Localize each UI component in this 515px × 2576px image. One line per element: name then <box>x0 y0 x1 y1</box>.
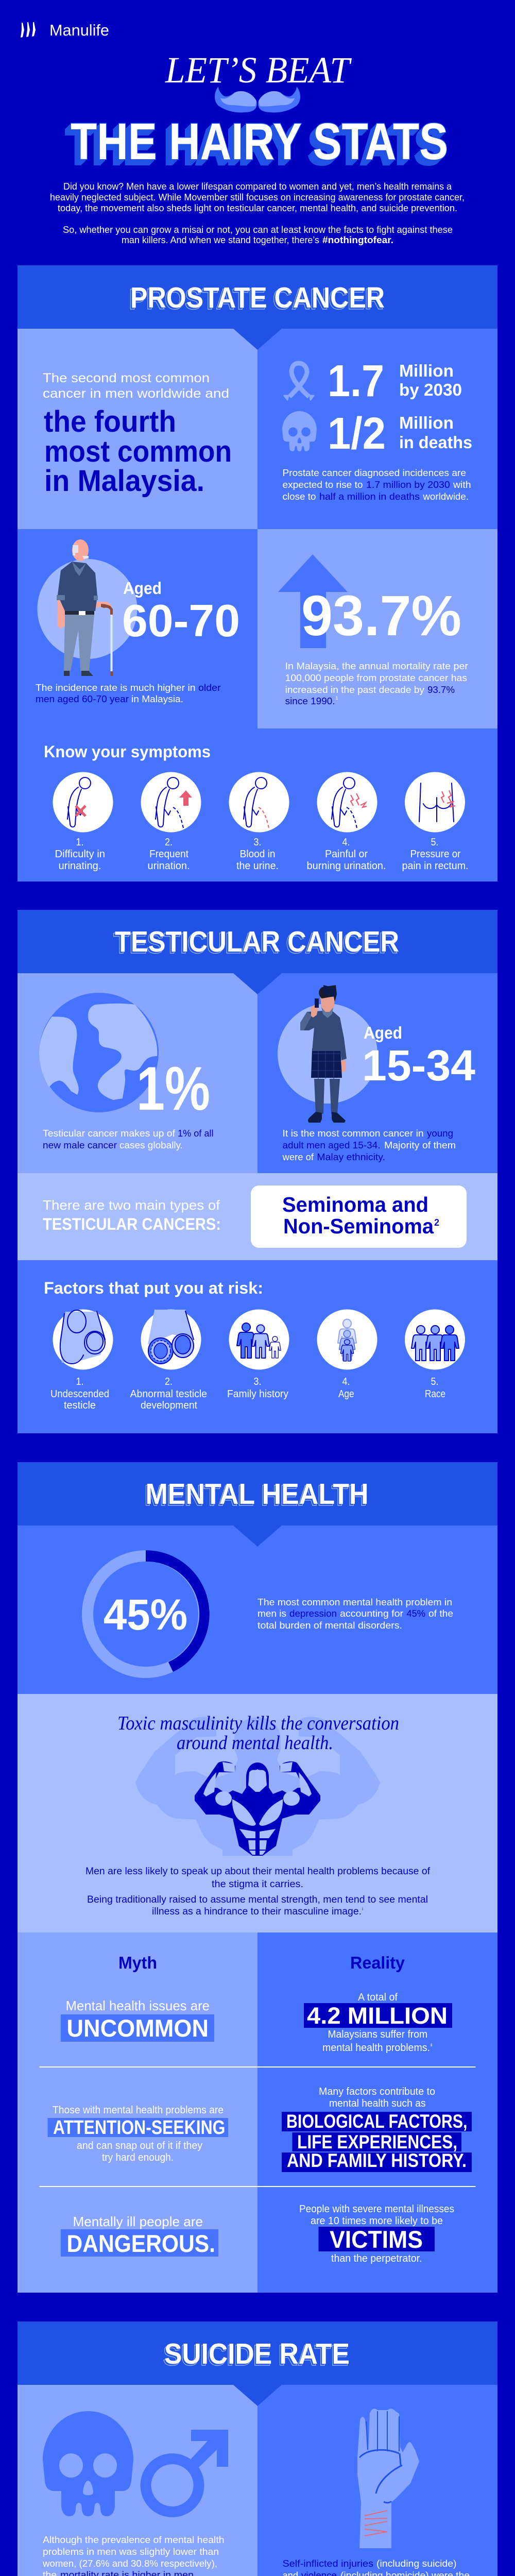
text: one percent: cases globally. <box>119 1140 183 1150</box>
text: depression: The most common mental health problem in <box>258 1597 452 1607</box>
myth 1: Mental health issues are <box>66 1998 210 2013</box>
heading: myth: Myth <box>118 1953 157 1972</box>
text: self-inflicted: Self-inflicted injuries <box>282 2558 373 2569</box>
panel: two main types <box>18 1173 497 1260</box>
symptom 5 <box>402 772 469 872</box>
text: incidences: close to <box>282 491 316 502</box>
illustration: muscle man shadow <box>135 1717 380 1856</box>
symptom 3 <box>229 772 289 872</box>
reality 3: are 10 times more likely to be <box>311 2215 443 2227</box>
text: mortality in men <box>42 2534 224 2576</box>
section: Testicular Cancer <box>18 910 497 1433</box>
text: young adult men <box>282 1128 456 1162</box>
panel: mortality <box>258 529 497 728</box>
reality 1: ii <box>431 2043 433 2047</box>
reality 3: People with severe mental illnesses <box>299 2204 454 2215</box>
myth 3 <box>61 2214 218 2257</box>
factor 2: 2. <box>165 1376 173 1387</box>
text: depression: 45% <box>407 1608 425 1619</box>
factor 2: development <box>141 1400 197 1411</box>
panel: testicular header <box>18 910 497 973</box>
text: one percent: Testicular cancer makes up of <box>43 1128 176 1139</box>
logo: Manulife: Manulife <box>49 21 109 39</box>
text: two main types: TESTICULAR CANCERS: <box>43 1215 221 1233</box>
pointer triangle <box>233 2385 282 2406</box>
text: depression: total burden of mental disorders. <box>258 1620 402 1631</box>
text: young adult men: It is the most common cancer in <box>282 1128 424 1139</box>
icon: moustache <box>215 87 300 112</box>
factor 2: Abnormal testicle <box>130 1388 207 1400</box>
reality 2: AND FAMILY HISTORY. <box>287 2150 467 2171</box>
symptom 2: urination. <box>147 860 190 872</box>
heading: Prostate Cancer: PROSTATE CANCER <box>129 283 383 316</box>
myth 2: ATTENTION-SEEKING <box>53 2117 226 2139</box>
text: mortality: since 1990. <box>285 696 335 706</box>
panel: prostate right top <box>258 329 497 529</box>
factor 4: 4. <box>342 1376 350 1387</box>
illustration: muscle man <box>195 1761 320 1856</box>
heading: Mental Health: MENTAL HEALTH <box>145 1478 369 1511</box>
text: one percent <box>43 1128 213 1150</box>
text: second most common <box>43 371 229 401</box>
text: incidences: 1.7 million by 2030 <box>366 479 450 490</box>
stat: 1/2 million in deaths: in deaths <box>399 433 472 452</box>
stat: 1.7 million by 2030: Million <box>399 361 454 380</box>
text: depression: depression <box>289 1608 337 1619</box>
illustration: young man on phone <box>278 985 377 1123</box>
text: young adult men: Majority of them <box>384 1140 456 1150</box>
text: mortality: 1 <box>336 696 338 701</box>
reality 2: LIFE EXPERIENCES, <box>297 2131 457 2153</box>
heading: Suicide Rate: SUICIDE RATE <box>163 2339 348 2372</box>
myth 1: UNCOMMON <box>67 2014 209 2042</box>
panel: reality <box>258 1933 497 2293</box>
text: fourth most common: the fourth <box>44 405 176 438</box>
stat: 93.7%: 93.7% <box>301 584 461 648</box>
pointer triangle <box>233 973 282 994</box>
text: one percent: 1% of all <box>178 1128 213 1139</box>
reality 1 <box>304 1992 452 2054</box>
myth 1 <box>61 1998 214 2042</box>
factor 1: 1. <box>76 1376 83 1387</box>
text: mortality <box>285 660 468 706</box>
text: two main types: There are two main types of <box>43 1197 220 1213</box>
icon: skull large <box>43 2411 133 2516</box>
text: toxic masculinity: Toxic masculinity kills the conversation <box>117 1713 399 1734</box>
symptom 4 <box>307 772 386 872</box>
stat: 1.7 million by 2030: by 2030 <box>399 380 462 399</box>
symptom 4: Painful or <box>325 849 368 860</box>
text: depression <box>258 1597 453 1631</box>
myth 2: and can snap out of it if they <box>77 2140 202 2151</box>
callout: seminoma: Non-Seminoma <box>283 1214 434 1238</box>
text: mortality: 93.7% <box>427 684 455 695</box>
section: Prostate Cancer <box>18 265 497 882</box>
text: mortality in men: problems in men was slightly lower than <box>43 2546 219 2557</box>
text: self-inflicted <box>282 2558 470 2576</box>
panel: myth <box>18 1933 258 2293</box>
symptom 1: Difficulty in <box>55 849 105 860</box>
stat: 1/2 million in deaths: 1/2 <box>328 409 386 459</box>
title: The Hairy Stats: THE HAIRY STATS <box>66 117 443 175</box>
stat: aged 15-34: Aged <box>364 1023 402 1042</box>
text: incidence rate: in Malaysia. <box>131 693 183 704</box>
intro text: heavily neglected subject. While Movember still focuses on increasing awareness for prostate cancer, <box>50 192 465 202</box>
text: young adult men: adult men aged 15-34. <box>282 1140 380 1150</box>
text: mortality in men: Although the prevalence of mental health <box>43 2534 225 2545</box>
heading: Suicide Rate: SUICIDE RATE <box>164 2337 350 2370</box>
stat: 1.7 million by 2030: 1.7 <box>328 356 384 406</box>
myth 2 <box>47 2105 228 2163</box>
icon: skull small <box>282 411 317 451</box>
callout: seminoma <box>251 1185 467 1248</box>
text: incidences: half a million in deaths <box>319 491 420 502</box>
icon: awareness ribbon <box>284 363 314 400</box>
stat: aged 60-70: Aged <box>123 579 162 598</box>
text: incidences: worldwide. <box>422 491 469 502</box>
title: The Hairy Stats: THE HAIRY STATS <box>71 113 448 171</box>
symptom 1: 1. <box>76 837 83 848</box>
symptom 4: 4. <box>342 837 350 848</box>
text: toxic masculinity <box>117 1713 399 1754</box>
reality 1: Malaysians suffer from <box>328 2029 427 2040</box>
pointer triangle <box>233 329 282 350</box>
text: incidences: expected to rise to <box>282 479 363 490</box>
text: mortality in men: women, (27.6% and 30.8% respectively), <box>42 2558 217 2569</box>
reality 1: A total of <box>358 1992 398 2003</box>
heading: Testicular Cancer: TESTICULAR CANCER <box>113 927 398 960</box>
panel: suicide header <box>18 2321 497 2385</box>
symptom 4: burning urination. <box>307 860 386 872</box>
intro text: today, the movement also sheds light on testicular cancer, mental health, and suicide prevention. <box>58 202 457 213</box>
symptom 3: 3. <box>253 837 262 848</box>
reality 1: mental health problems. <box>322 2042 430 2054</box>
intro text <box>50 181 465 245</box>
title: Let's Beat: LET’S BEAT <box>165 49 352 91</box>
text: fourth most common <box>44 405 232 498</box>
factor 1: testicle <box>64 1400 96 1411</box>
myth 3: Mentally ill people are <box>73 2214 203 2229</box>
stat: aged 60-70: 60-70 <box>122 595 240 646</box>
text: incidences: with <box>453 479 471 490</box>
text: fourth most common: in Malaysia. <box>44 464 204 498</box>
factor 5: 5. <box>431 1376 439 1387</box>
title: The Hairy Stats: THE HAIRY STATS <box>65 118 442 176</box>
title: The Hairy Stats: THE HAIRY STATS <box>68 115 445 173</box>
heading: Mental Health: MENTAL HEALTH <box>144 1479 367 1512</box>
stat: 1/2 million in deaths <box>328 409 472 459</box>
symptom 5: Pressure or <box>410 849 461 860</box>
text: depression: of the <box>428 1608 453 1619</box>
text: depression: accounting for <box>340 1608 403 1619</box>
reality 1: 4.2 MILLION <box>307 2003 448 2029</box>
panel: risk factors <box>18 1260 497 1433</box>
reality 2: Many factors contribute to <box>319 2086 435 2097</box>
illustration: wrist <box>357 2409 419 2548</box>
stat: 1.7 million by 2030 <box>328 356 462 406</box>
stat: aged 15-34: 15-34 <box>362 1041 475 1090</box>
icon: up arrow <box>278 554 348 648</box>
text: incidences: Prostate cancer diagnosed incidences are <box>282 467 466 478</box>
text: incidence rate: older <box>198 682 221 693</box>
text: incidence rate <box>36 682 221 704</box>
stat: 1%: 1% <box>136 1054 210 1123</box>
text: stigma: i <box>362 1907 363 1911</box>
icon: globe <box>39 993 159 1112</box>
chart: 45 percent donut <box>88 1550 210 1672</box>
text: one percent: new male cancer <box>43 1140 117 1150</box>
divider <box>39 2066 476 2067</box>
logo: Manulife <box>21 21 109 39</box>
factor 2 <box>130 1310 207 1411</box>
pointer triangle <box>233 1526 282 1547</box>
title: The Hairy Stats: THE HAIRY STATS <box>69 114 447 172</box>
panel: toxic masculinity <box>18 1694 497 1933</box>
text: incidences <box>282 467 471 502</box>
panel: prostate header <box>18 265 497 329</box>
callout: seminoma: Seminoma and <box>282 1193 428 1216</box>
panel: testicular right <box>258 973 497 1173</box>
heading: know your symptoms: Know your symptoms <box>44 742 211 761</box>
symptom 2 <box>141 772 201 872</box>
text: stigma: the stigma it carries. <box>212 1879 303 1890</box>
symptom 2: Frequent <box>149 849 188 860</box>
text: toxic masculinity: around mental health. <box>177 1732 333 1754</box>
symptom 3: Blood in <box>240 849 275 860</box>
panel: depression <box>18 1526 497 1694</box>
intro text: man killers. And when we stand together, there’s <box>122 234 319 245</box>
section: Suicide Rate <box>18 2321 497 2576</box>
text: mortality: 100,000 people from prostate cancer has <box>285 672 467 683</box>
symptom 2: 2. <box>165 837 173 848</box>
chart: 45 percent donut: 45% <box>104 1590 187 1639</box>
myth 2: try hard enough. <box>102 2152 174 2163</box>
text: self-inflicted: (including suicide) <box>376 2558 456 2569</box>
reality 3 <box>299 2204 454 2264</box>
text: incidence rate: men aged 60-70 year <box>36 693 129 704</box>
heading: Prostate Cancer: PROSTATE CANCER <box>130 281 385 314</box>
text: young adult men: Malay ethnicity. <box>317 1151 385 1162</box>
factor 5 <box>405 1310 465 1400</box>
intro text: Did you know? Men have a lower lifespan compared to women and yet, men’s health remains a <box>63 181 452 192</box>
factor 1: Undescended <box>50 1388 109 1400</box>
factor 4: Age <box>338 1388 354 1400</box>
symptom 5: 5. <box>431 837 439 848</box>
text: second most common: cancer in men worldwide and <box>43 386 229 401</box>
text: young adult men: young <box>427 1128 453 1139</box>
panel: suicide right top <box>258 2385 497 2576</box>
symptom 1 <box>53 772 113 872</box>
text: incidence rate: The incidence rate is much higher in <box>36 682 196 693</box>
divider <box>39 2186 476 2187</box>
reality 3: VICTIMS <box>330 2226 423 2253</box>
text: fourth most common: most common <box>44 435 232 468</box>
icon: male symbol <box>146 2430 228 2512</box>
illustration: older man <box>37 539 137 676</box>
title: The Hairy Stats: THE HAIRY STATS <box>67 116 444 174</box>
intro text: So, whether you can grow a misai or not, you can at least know the facts to fight against these <box>63 224 453 235</box>
panel: prostate left top <box>18 329 258 529</box>
reality 2: BIOLOGICAL FACTORS, <box>286 2111 468 2132</box>
panel: symptoms and age background <box>18 529 497 882</box>
text: second most common: The second most common <box>43 371 210 385</box>
symptom 5: pain in rectum. <box>402 860 469 872</box>
text: stigma: illness as a hindrance to their masculine image. <box>152 1906 362 1917</box>
stat: 1/2 million in deaths: Million <box>399 413 454 432</box>
intro text: #nothingtofear. <box>322 234 393 245</box>
reality 2: mental health such as <box>329 2098 425 2109</box>
factor 5: Race <box>425 1388 445 1400</box>
factor 3: Family history <box>227 1388 288 1400</box>
text: stigma <box>85 1866 431 1917</box>
panel: mental header <box>18 1462 497 1526</box>
factor 4 <box>317 1310 377 1400</box>
section: Mental Health <box>18 1462 497 2293</box>
text: depression: men is <box>258 1608 286 1619</box>
reality 2 <box>282 2086 472 2172</box>
text: young adult men: were of <box>282 1151 314 1162</box>
text: stigma: Being traditionally raised to assume mental strength, men tend to see mental <box>87 1894 428 1905</box>
factor 1 <box>50 1310 113 1411</box>
myth 2: Those with mental health problems are <box>53 2105 224 2116</box>
panel: testicular left <box>18 973 258 1173</box>
text: mortality: In Malaysia, the annual mortality rate per <box>285 660 468 671</box>
panel: suicide left top <box>18 2385 258 2576</box>
callout: seminoma: 2 <box>434 1217 439 1228</box>
reality 3: than the perpetrator. <box>331 2253 422 2264</box>
text: stigma: Men are less likely to speak up about their mental health problems because of <box>85 1866 431 1877</box>
myth 3: DANGEROUS. <box>67 2230 215 2257</box>
factor 3 <box>227 1310 289 1400</box>
heading: Testicular Cancer: TESTICULAR CANCER <box>115 925 399 958</box>
heading: reality: Reality <box>350 1953 405 1972</box>
text: mortality: increased in the past decade by <box>285 684 425 695</box>
symptom 3: the urine. <box>236 860 279 872</box>
heading: factors: Factors that put you at risk: <box>44 1279 263 1297</box>
symptom 1: urinating. <box>59 860 101 872</box>
factor 3: 3. <box>253 1376 262 1387</box>
text: two main types <box>43 1197 221 1233</box>
